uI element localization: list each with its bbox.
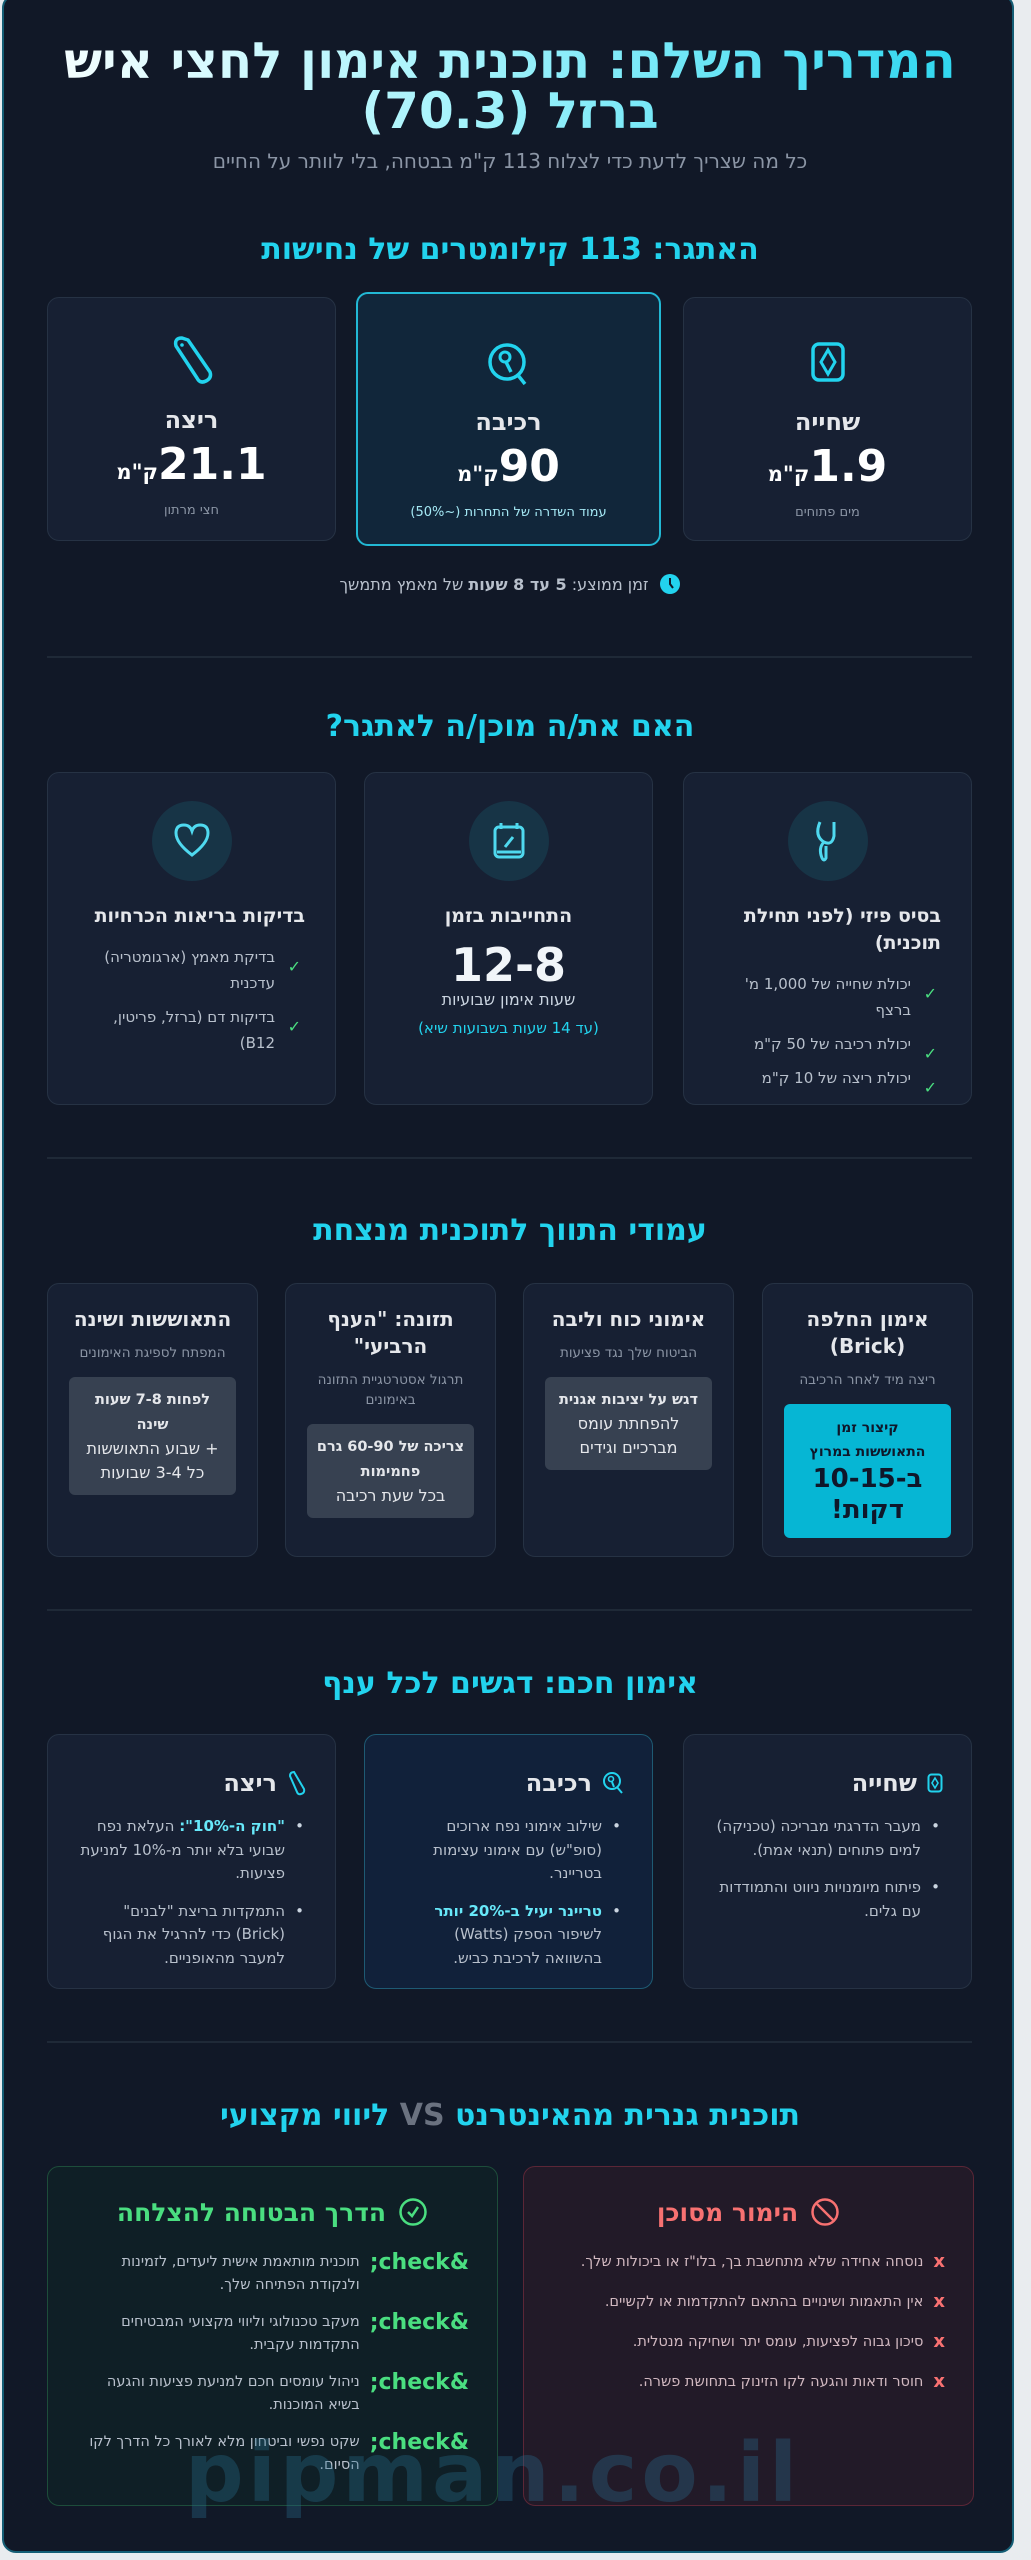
subtitle: כל מה שצריך לדעת כדי לצלוח 113 ק"מ בבטחה, בלי לוותר על החיים xyxy=(213,149,807,173)
callout: brick xyxy=(784,1404,951,1538)
panel: nutrition: תזונה: "הענף הרביעי" xyxy=(327,1307,454,1358)
panel: run tips: ריצה xyxy=(223,1769,277,1797)
callout: brick: קיצור זמן xyxy=(836,1420,899,1436)
panel: nutrition: תרגול אסטרטגיית התזונה באימונים xyxy=(318,1372,463,1408)
panel: risky gamble: סיכון גבוה לפציעות, עומס יתר ושחיקה מנטלית. xyxy=(633,2334,923,2350)
icon: clock xyxy=(660,574,680,594)
panel: swim tips xyxy=(683,1734,972,1989)
icon: stethoscope xyxy=(788,801,868,881)
panel: safe path: מעקב טכנולוגי וליווי מקצועי המבטיחים התקדמות עקבית. xyxy=(121,2314,360,2353)
callout: brick: דקות! xyxy=(831,1495,904,1525)
callout: brick: התאוששות במרוץ xyxy=(810,1444,925,1460)
panel: bike tips: רכיבה xyxy=(526,1769,592,1797)
heading: the challenge: האתגר: 113 קילומטרים של נחישות xyxy=(261,232,759,267)
heading: readiness: האם את/ה מוכן/ה לאתגר? xyxy=(326,709,694,744)
panel: physical base: יכולת שחייה של 1,000 מ' ברצף xyxy=(745,975,911,1019)
panel: recovery xyxy=(47,1283,258,1557)
panel: risky gamble: x xyxy=(933,2291,945,2312)
panel: health checks: בדיקת מאמץ (ארגומטריה) עדכנית xyxy=(104,948,275,992)
callout: strength xyxy=(545,1377,712,1470)
panel: risky gamble: חוסר ודאות והגעה לקו הזינוק בתחושת פשרה. xyxy=(639,2374,923,2390)
panel: swim tips: פיתוח מיומנויות ניווט והתמודדות עם גלים. xyxy=(719,1878,921,1920)
panel: health checks xyxy=(47,772,336,1105)
callout: strength: להפחתת עומס מברכיים וגידים xyxy=(578,1414,679,1457)
title: המדריך השלם: תוכנית אימון לחצי איש xyxy=(64,32,956,90)
panel: safe path: תוכנית מותאמת אישית ליעדים, לזמינות ולנקודת הפתיחה שלך. xyxy=(122,2254,360,2293)
panel: brick: אימון החלפה (Brick) xyxy=(806,1307,929,1358)
panel: strength: אימוני כוח וליבה xyxy=(552,1307,705,1331)
title: ברזל (70.3) xyxy=(361,82,659,140)
panel: safe path xyxy=(47,2166,498,2506)
callout: strength: דגש על יציבות אגנית xyxy=(559,1392,698,1408)
panel: health checks: בדיקות בריאות הכרחיות xyxy=(95,905,305,927)
icon: heart xyxy=(152,801,232,881)
panel: swim: מים פתוחים xyxy=(795,505,860,520)
panel: swim tips: מעבר הדרגתי מבריכה (טכניקה) למים פתוחים (תנאי אמת). xyxy=(717,1817,921,1858)
panel: bike (featured): רכיבה xyxy=(475,408,542,436)
panel: safe path: שקט נפשי וביטחון מלא לאורך כל הדרך לקו הסיום. xyxy=(89,2434,360,2473)
panel: physical base: יכולת ריצה של 10 ק"מ xyxy=(762,1069,911,1087)
panel: recovery: התאוששות ושינה xyxy=(74,1307,231,1331)
panel: safe path: &check; xyxy=(370,2430,469,2455)
watermark: pipman.co.il xyxy=(185,2426,801,2521)
panel: risky gamble: x xyxy=(933,2251,945,2272)
panel: health checks: בדיקות דם (ברזל, פריטין, B12) xyxy=(113,1008,275,1052)
panel: run xyxy=(47,297,336,541)
panel: bike (featured): עמוד השדרה של התחרות (~50%) xyxy=(410,505,607,520)
panel: nutrition xyxy=(285,1283,496,1557)
panel: time commitment: שעות אימון שבועיות xyxy=(442,990,575,1009)
callout: nutrition: בכל שעת רכיבה xyxy=(336,1486,445,1505)
icon: bike xyxy=(488,343,526,386)
panel: time commitment: 12-8 xyxy=(451,938,566,992)
panel: swim tips: שחייה xyxy=(852,1769,917,1797)
time note: זמן ממוצע: 5 עד 8 שעות של מאמץ מתמשך xyxy=(339,574,649,594)
panel: safe path: &check; xyxy=(370,2250,469,2275)
panel: recovery: המפתח לספיגת האימונים xyxy=(79,1345,226,1361)
callout: recovery: + שבוע התאוששות כל 3-4 שבועות xyxy=(86,1439,219,1482)
panel: bike tips: טריינר יעיל ב-20% יותר לשיפור הספק (Watts) בהשוואה לרכיבת כביש. xyxy=(434,1902,602,1966)
panel: risky gamble: הימור מסוכן xyxy=(657,2198,798,2226)
panel: strength xyxy=(523,1283,734,1557)
panel: risky gamble: אין התאמות ושינויים בהתאם להתקדמות או לקשיים. xyxy=(605,2294,923,2310)
panel: run tips xyxy=(47,1734,336,1989)
icon: calendar xyxy=(468,801,548,881)
panel: risky gamble: x xyxy=(933,2331,945,2352)
panel: swim xyxy=(683,297,972,541)
panel: brick xyxy=(762,1283,973,1557)
panel: safe path: &check; xyxy=(370,2310,469,2335)
panel: physical base: יכולת רכיבה של 50 ק"מ xyxy=(754,1035,911,1053)
callout: nutrition xyxy=(307,1424,474,1518)
panel: swim: שחייה xyxy=(795,408,860,436)
panel: bike tips: שילוב אימוני נפח ארוכים (סופ"ש) עם אימוני עצימות בטריינר. xyxy=(433,1817,602,1882)
panel: time commitment: התחייבות בזמן xyxy=(445,905,572,927)
callout: nutrition: צריכה של 60-90 גרם פחמימות xyxy=(317,1439,464,1480)
panel: run tips: התמקדות בריצת "לבנים" (Brick) כדי להרגיל את הגוף למעבר מהאופניים. xyxy=(103,1902,285,1966)
title xyxy=(4,36,1016,136)
panel: swim: 1.9ק"מ xyxy=(768,441,887,492)
panel: run: חצי מרתון xyxy=(164,503,219,518)
panel: strength: הביטוח שלך נגד פציעות xyxy=(560,1345,697,1361)
panel: time commitment: (עד 14 שעות בשבועות שיא) xyxy=(418,1019,599,1037)
panel: run: 21.1ק"מ xyxy=(116,439,267,490)
panel: time commitment xyxy=(364,772,653,1105)
panel: risky gamble xyxy=(523,2166,974,2506)
panel: physical base: בסיס פיזי (לפני תחילת תוכנית) xyxy=(744,905,941,954)
panel: bike tips xyxy=(364,1734,653,1989)
panel: run: ריצה xyxy=(165,406,218,434)
panel: risky gamble: נוסחה אחידה שלא מתחשבת בך, בלו"ז או ביכולות שלך. xyxy=(581,2254,923,2270)
panel: bike (featured): 90ק"מ xyxy=(457,441,560,492)
heading: smart training: אימון חכם: דגשים לכל ענף xyxy=(322,1666,698,1701)
icon: run xyxy=(174,336,212,384)
callout: brick: ב-10-15 xyxy=(813,1464,922,1494)
panel: safe path: &check; xyxy=(370,2370,469,2395)
heading: pillars: עמודי התווך לתוכנית מנצחת xyxy=(313,1213,707,1248)
panel: risky gamble: x xyxy=(933,2371,945,2392)
panel: bike (featured) xyxy=(356,292,661,546)
callout: recovery: לפחות 7-8 שעות שינה xyxy=(95,1392,210,1433)
callout: recovery xyxy=(69,1377,236,1495)
panel: safe path: הדרך הבטוחה להצלחה xyxy=(117,2198,386,2226)
panel: run tips: "חוק ה-10%": העלאת נפח שבועי בלא יותר מ-10% למניעת פציעות. xyxy=(81,1817,285,1882)
icon: swim xyxy=(811,342,845,382)
heading: comparison: תוכנית גנרית מהאינטרנט VS ליווי מקצועי xyxy=(220,2098,800,2133)
panel: physical base xyxy=(683,772,972,1105)
panel: safe path: ניהול עומסים חכם למניעת פציעות והגעה בשיא המוכנות. xyxy=(107,2374,360,2413)
panel: brick: ריצה מיד לאחר הרכיבה xyxy=(799,1372,936,1388)
